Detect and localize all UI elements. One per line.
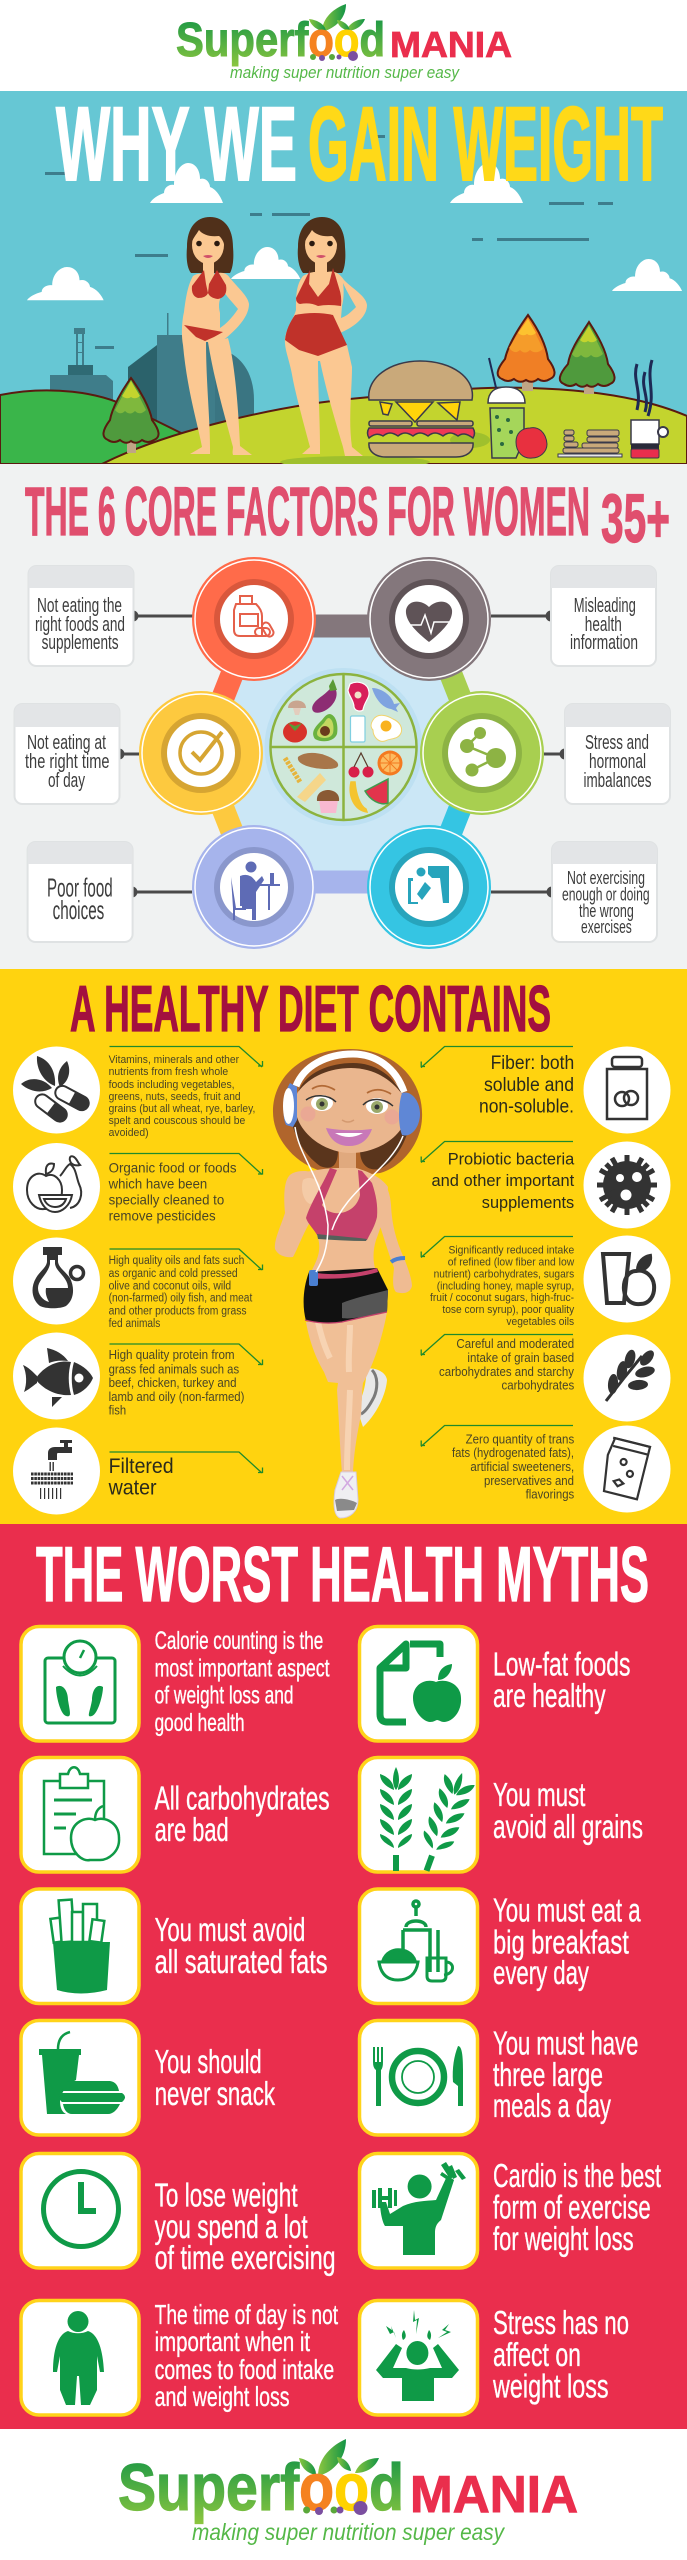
icon: clipboard apple bbox=[44, 1767, 119, 1860]
panel: six core factors bbox=[0, 464, 687, 969]
icon: dumbbell man bbox=[372, 2162, 466, 2255]
text: carbohydrates: are bad bbox=[155, 1811, 229, 1848]
icon: workout figure bbox=[408, 866, 449, 904]
box: misleading information: health bbox=[585, 614, 622, 636]
text: organic food: specially cleaned to bbox=[109, 1191, 224, 1207]
text: cardio bbox=[493, 2157, 661, 2257]
circle: supplements bbox=[192, 557, 316, 681]
text: grains bbox=[493, 1776, 643, 1845]
text: time exercising: you spend a lot bbox=[155, 2208, 308, 2245]
plate of food bbox=[264, 668, 422, 826]
sports top bbox=[306, 1168, 377, 1240]
logo leaves bbox=[309, 4, 365, 32]
text: three large meals: meals a day bbox=[493, 2087, 611, 2124]
text: refined carbs: nutrient) carbohydrates, sugars bbox=[434, 1269, 575, 1281]
text: probiotics bbox=[432, 1150, 575, 1212]
panel: healthy diet bbox=[0, 969, 687, 1524]
icon: network nodes bbox=[460, 727, 506, 776]
overweight woman bbox=[285, 217, 367, 456]
text: oils and fats: as organic and cold pressed bbox=[109, 1268, 238, 1280]
text: vitamins: spelt and couscous should be bbox=[109, 1115, 245, 1127]
box: stress and hormones bbox=[565, 704, 670, 804]
text: refined carbs: vegetables oils bbox=[506, 1316, 575, 1328]
smoothie cup bbox=[488, 358, 525, 458]
text: refined carbs: of refined (low fiber and low bbox=[448, 1257, 574, 1269]
plate: bread bbox=[298, 753, 338, 769]
plate: avocado bbox=[313, 714, 337, 741]
text: saturated fats bbox=[155, 1911, 328, 1980]
text: time of day: important when it bbox=[155, 2326, 310, 2357]
box: not exercising bbox=[552, 842, 657, 942]
text: refined carbs bbox=[430, 1245, 575, 1328]
text: organic food bbox=[108, 1160, 237, 1223]
apple bbox=[516, 428, 547, 458]
text: grain carbs: carbohydrates and starchy bbox=[439, 1365, 575, 1379]
box: not exercising: exercises bbox=[581, 917, 632, 937]
text: calorie counting: good health bbox=[155, 1709, 245, 1737]
panel: footer logo bbox=[0, 2429, 687, 2560]
plate: orange bbox=[378, 750, 402, 776]
icon: pill bottle bbox=[234, 596, 275, 638]
text: time exercising bbox=[155, 2176, 336, 2276]
plate: watermelon bbox=[365, 779, 388, 804]
box: right time of day bbox=[14, 704, 120, 804]
box: right time of day: of day bbox=[48, 769, 85, 792]
footer wordmark superfood: Superfood bbox=[118, 2450, 404, 2524]
icon: fries bbox=[50, 1900, 110, 1994]
tree orange bbox=[498, 315, 555, 391]
text: saturated fats: You must avoid bbox=[155, 1911, 305, 1948]
text: protein: beef, chicken, turkey and bbox=[109, 1376, 237, 1390]
text: grain carbs bbox=[439, 1337, 575, 1393]
text: grains: You must bbox=[493, 1776, 585, 1813]
hero title: WHY WE bbox=[56, 86, 297, 203]
box: poor food choices bbox=[28, 842, 133, 942]
text: probiotics: Probiotic bacteria bbox=[448, 1150, 575, 1168]
box: misleading information: Misleading bbox=[574, 595, 636, 617]
text: big breakfast: big breakfast bbox=[493, 1923, 629, 1960]
text: organic food: Organic food or foods bbox=[109, 1160, 237, 1176]
lowered arm bbox=[375, 1180, 412, 1293]
icon: water tap bbox=[31, 1440, 73, 1499]
panel: worst health myths bbox=[0, 1524, 687, 2429]
text: time of day: and weight loss bbox=[155, 2381, 290, 2412]
text: grain carbs: intake of grain based bbox=[467, 1351, 574, 1365]
icon: oil jug bbox=[33, 1247, 84, 1308]
box: not eating right foods: Not eating the bbox=[37, 595, 122, 617]
text: snack: never snack bbox=[155, 2075, 275, 2112]
circle: exercise bbox=[367, 825, 491, 949]
logo wordmark superfood: Superfood bbox=[176, 14, 385, 67]
text: saturated fats: all saturated fats bbox=[155, 1943, 328, 1980]
connectors bbox=[114, 610, 570, 898]
text: protein: High quality protein from bbox=[109, 1348, 235, 1362]
text: protein: grass fed animals such as bbox=[109, 1362, 239, 1376]
icon: clock bbox=[44, 2172, 118, 2246]
diet text right column bbox=[430, 1053, 575, 1502]
box: right time of day: Not eating at bbox=[27, 731, 106, 754]
text: fiber bbox=[479, 1053, 574, 1118]
text: fiber: soluble and bbox=[484, 1075, 574, 1096]
icon: probiotic bacteria bbox=[597, 1155, 657, 1215]
text: vitamins: Vitamins, minerals and other bbox=[109, 1054, 239, 1066]
icon: soda and burger bbox=[39, 2032, 125, 2114]
text: vitamins: nutrients from fresh whole bbox=[109, 1066, 228, 1078]
hexagon frame bbox=[201, 619, 482, 887]
text: fiber: non-soluble. bbox=[479, 1097, 574, 1118]
running girl figure bbox=[273, 1049, 422, 1518]
text: stress bbox=[492, 2304, 629, 2404]
icon: stressed person bbox=[376, 2310, 459, 2401]
text: trans fats bbox=[452, 1432, 574, 1502]
diet icon circles bbox=[13, 1046, 670, 1514]
panel: hero scene bbox=[0, 86, 687, 468]
clouds bbox=[27, 163, 682, 300]
text: low fat: Low-fat foods bbox=[493, 1646, 630, 1682]
icon: supplement jar bbox=[607, 1057, 647, 1119]
text: refined carbs: Significantly reduced intake bbox=[448, 1245, 574, 1257]
box: misleading information bbox=[551, 566, 656, 666]
box: stress and hormones: imbalances bbox=[584, 769, 652, 792]
box: right time of day: the right time bbox=[25, 750, 110, 773]
plate: bacon bbox=[297, 773, 326, 802]
text: grain carbs: carbohydrates bbox=[502, 1379, 574, 1393]
text: trans fats: artificial sweeteners, bbox=[470, 1460, 574, 1474]
tree left bbox=[103, 378, 159, 453]
icon: heavy person bbox=[53, 2311, 104, 2405]
footer logo leaves bbox=[299, 2439, 379, 2476]
circle: clock bbox=[139, 691, 263, 815]
icon: bathroom scale bbox=[45, 1641, 115, 1723]
text: vitamins: avoided) bbox=[109, 1127, 149, 1139]
icon: heart pulse bbox=[406, 602, 452, 642]
plate: banana bbox=[350, 782, 367, 812]
burger bbox=[368, 361, 474, 457]
icon: plate and cutlery bbox=[373, 2046, 463, 2106]
text: time exercising: of time exercising bbox=[155, 2239, 336, 2276]
text: time of day bbox=[155, 2299, 338, 2412]
plate: egg bbox=[371, 715, 402, 741]
text: filtered water: water bbox=[108, 1476, 157, 1499]
icon: wheat ear bbox=[606, 1348, 657, 1401]
factory skyline bbox=[50, 313, 254, 440]
plate: milk bbox=[350, 716, 365, 742]
text: carbohydrates: All carbohydrates bbox=[155, 1780, 330, 1817]
icon: snack bag bbox=[599, 1437, 651, 1500]
text: trans fats: Zero quantity of trans bbox=[466, 1432, 574, 1446]
text: protein: lamb and oily (non-farmed) bbox=[109, 1390, 244, 1404]
text: organic food: which have been bbox=[108, 1175, 207, 1191]
text: trans fats: fats (hydrogenated fats), bbox=[452, 1446, 574, 1460]
text: three large meals bbox=[493, 2025, 638, 2124]
box: poor food choices: choices bbox=[53, 895, 104, 925]
text: oils and fats: (non-farmed) oily fish, and meat bbox=[109, 1293, 253, 1305]
bent leg shoe bbox=[360, 1369, 387, 1427]
text: stress: weight loss bbox=[492, 2368, 609, 2404]
plate: steak bbox=[348, 682, 369, 711]
pancakes bbox=[558, 430, 622, 457]
torso bbox=[300, 1168, 388, 1274]
text: oils and fats: High quality oils and fats such bbox=[109, 1255, 244, 1267]
text: refined carbs: (including honey, maple syrup, bbox=[437, 1280, 574, 1292]
icon: leaves and capsules bbox=[21, 1056, 91, 1124]
myth card frames bbox=[21, 1626, 478, 2415]
pointer lines bbox=[110, 1046, 573, 1473]
text: vitamins bbox=[109, 1054, 255, 1139]
text: vitamins: foods including vegetables, bbox=[109, 1079, 235, 1091]
text: filtered water: Filtered bbox=[109, 1455, 174, 1478]
text: probiotics: and other important bbox=[432, 1172, 575, 1190]
logo wordmark mania: MANIA bbox=[390, 24, 512, 65]
text: trans fats: preservatives and bbox=[484, 1474, 574, 1488]
circle: poor food choices bbox=[192, 825, 316, 949]
text: snack: You should bbox=[155, 2043, 262, 2080]
text: big breakfast: every day bbox=[493, 1954, 589, 1991]
box: stress and hormones: hormonal bbox=[589, 750, 646, 773]
diet text left column bbox=[108, 1054, 255, 1499]
text: oils and fats: olive and coconut oils, wild bbox=[109, 1280, 231, 1292]
icon: person at table bbox=[231, 862, 280, 920]
icon: organic fruit bbox=[27, 1156, 81, 1212]
text: grain carbs: Careful and moderated bbox=[456, 1337, 574, 1351]
shadow patches bbox=[280, 432, 490, 468]
box: misleading information: information bbox=[570, 632, 638, 654]
slim woman bbox=[182, 217, 252, 455]
text: oils and fats bbox=[109, 1255, 253, 1330]
icon: wheat stalks bbox=[380, 1767, 477, 1876]
hills bbox=[0, 388, 687, 464]
earphone wires bbox=[295, 1127, 403, 1272]
text: refined carbs: fruit / coconut sugars, high-fruc- bbox=[430, 1292, 574, 1304]
text: vitamins: grains (but all wheat, rye, barley, bbox=[109, 1103, 255, 1115]
icon: refined carbs glass and apple bbox=[603, 1254, 654, 1304]
box: stress and hormones: Stress and bbox=[585, 731, 649, 754]
text: calorie counting: most important aspect bbox=[155, 1654, 330, 1682]
plate: cherries bbox=[348, 753, 374, 778]
lower shoe bbox=[334, 1472, 358, 1518]
icon: document apple bbox=[380, 1644, 461, 1722]
icon: breakfast set bbox=[379, 1901, 453, 1981]
text: stress: affect on bbox=[493, 2336, 581, 2373]
text: protein: fish bbox=[109, 1404, 126, 1418]
myth text left column bbox=[155, 1627, 338, 2412]
box: not exercising: Not exercising bbox=[567, 868, 645, 888]
text: oils and fats: fed animals bbox=[109, 1318, 161, 1330]
tree green right bbox=[560, 322, 615, 394]
icon: clock check bbox=[180, 732, 222, 774]
box: not eating right foods: right foods and bbox=[35, 614, 125, 636]
text: time of day: comes to food intake bbox=[155, 2354, 334, 2385]
shorts bbox=[304, 1268, 388, 1323]
plate: muffin bbox=[317, 790, 339, 813]
myth text right column bbox=[492, 1646, 661, 2404]
circle: heart bbox=[367, 557, 491, 681]
plate: tomato bbox=[283, 722, 307, 742]
text: filtered water bbox=[108, 1455, 174, 1499]
box: poor food choices: Poor food bbox=[47, 872, 113, 902]
text: oils and fats: and other products from grass bbox=[109, 1305, 247, 1317]
text: vitamins: greens, nuts, seeds, fruit and bbox=[109, 1091, 241, 1103]
text: calorie counting: Calorie counting is the bbox=[155, 1627, 323, 1655]
text: protein bbox=[109, 1348, 244, 1418]
icon: fish bbox=[23, 1348, 93, 1407]
plate: fish bbox=[372, 688, 400, 712]
plate: wheat bbox=[285, 758, 300, 782]
footer wordmark mania: MANIA bbox=[410, 2466, 578, 2524]
headphones bbox=[283, 1083, 297, 1127]
footer berries bbox=[303, 2501, 368, 2515]
text: calorie counting: of weight loss and bbox=[155, 1682, 294, 1710]
text: fiber: Fiber: both bbox=[491, 1053, 574, 1074]
text: time exercising: To lose weight bbox=[155, 2176, 298, 2214]
footer tagline: making super nutrition super easy bbox=[192, 2519, 505, 2545]
logo berries bbox=[310, 51, 358, 61]
text: organic food: remove pesticides bbox=[109, 1207, 216, 1223]
text: time of day: The time of day is not bbox=[155, 2299, 338, 2330]
coffee mug and steam bbox=[631, 360, 668, 458]
box: not eating right foods: supplements bbox=[42, 632, 119, 654]
legs bbox=[306, 1312, 387, 1473]
panel: header logo bbox=[0, 0, 687, 91]
text: low fat bbox=[493, 1646, 630, 1714]
face bbox=[295, 1068, 407, 1153]
text: refined carbs: tose corn syrup), poor quality bbox=[442, 1304, 575, 1316]
text: big breakfast bbox=[493, 1892, 641, 1991]
logo tagline: making super nutrition super easy bbox=[230, 63, 460, 82]
box: not eating right foods bbox=[28, 566, 134, 666]
text: low fat: are healthy bbox=[493, 1677, 606, 1714]
text: trans fats: flavorings bbox=[526, 1488, 574, 1502]
text: calorie counting bbox=[155, 1627, 330, 1737]
text: carbohydrates bbox=[155, 1780, 330, 1848]
plate: eggplant bbox=[312, 679, 337, 713]
raised arm bbox=[275, 1171, 323, 1257]
sky dashes bbox=[45, 135, 613, 349]
plate: mushroom bbox=[288, 700, 306, 715]
circle: share bbox=[420, 691, 544, 815]
text: snack bbox=[155, 2043, 275, 2112]
box: not exercising: the wrong bbox=[579, 901, 634, 921]
text: three large meals: three large bbox=[493, 2056, 603, 2093]
text: probiotics: supplements bbox=[482, 1194, 574, 1212]
